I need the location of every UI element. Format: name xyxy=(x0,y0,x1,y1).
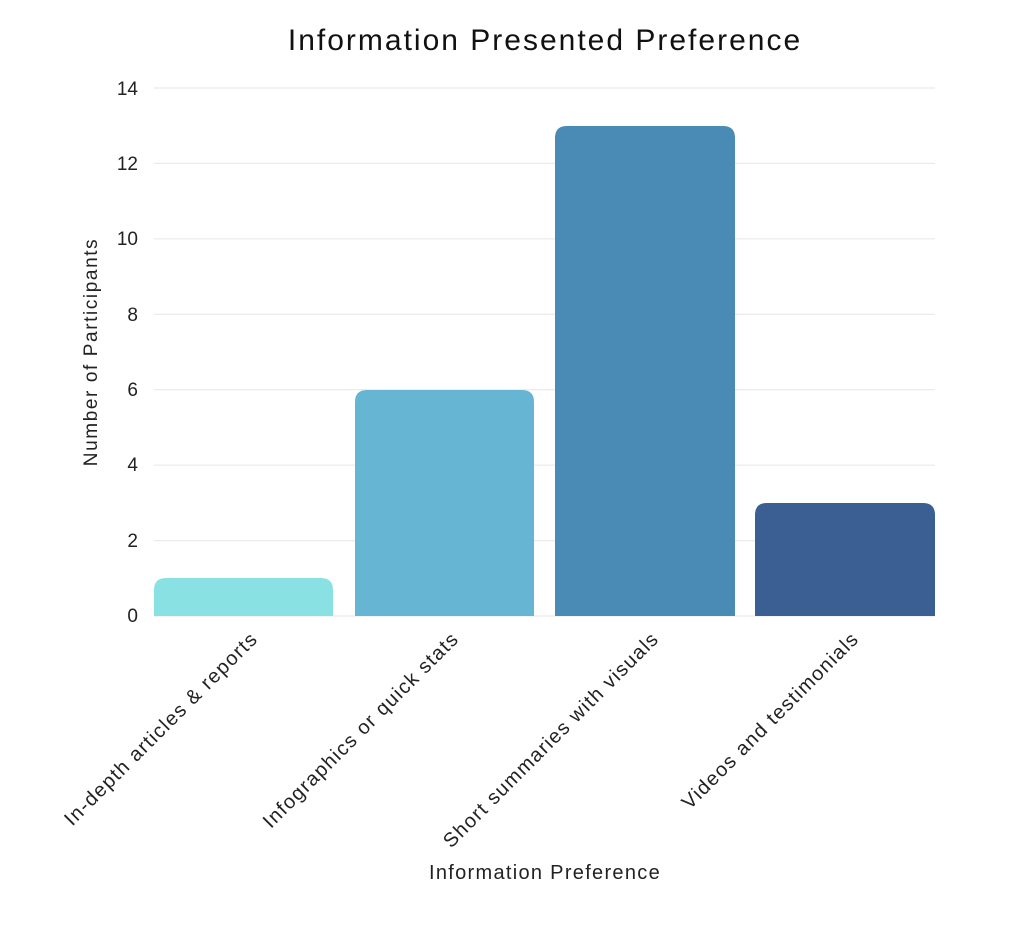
y axis tick labels: 12 xyxy=(117,154,138,175)
bar: Infographics or quick stats xyxy=(355,390,534,616)
bar: Short summaries with visuals xyxy=(555,126,735,616)
x axis labels: Infographics or quick stats xyxy=(259,628,464,833)
y axis tick labels: 14 xyxy=(117,79,138,100)
bar: In-depth articles & reports xyxy=(154,578,333,616)
x axis labels: Short summaries with visuals xyxy=(439,628,664,852)
title: Information Presented Preference xyxy=(288,24,802,57)
x axis labels xyxy=(60,628,864,852)
y axis title: Number of Participants xyxy=(81,238,102,466)
x axis labels: In-depth articles & reports xyxy=(60,628,263,830)
y axis tick labels: 4 xyxy=(127,455,138,476)
y axis tick labels: 2 xyxy=(127,531,138,552)
y axis tick labels: 8 xyxy=(127,305,138,326)
y axis tick labels: 6 xyxy=(127,380,138,401)
bar chart xyxy=(154,126,935,616)
y axis tick labels: 10 xyxy=(117,229,138,250)
x axis title: Information Preference xyxy=(429,862,661,884)
y axis tick labels: 0 xyxy=(127,606,138,627)
x axis labels: Videos and testimonials xyxy=(678,628,864,814)
bar: Videos and testimonials xyxy=(755,503,935,616)
y axis tick labels xyxy=(117,79,138,627)
